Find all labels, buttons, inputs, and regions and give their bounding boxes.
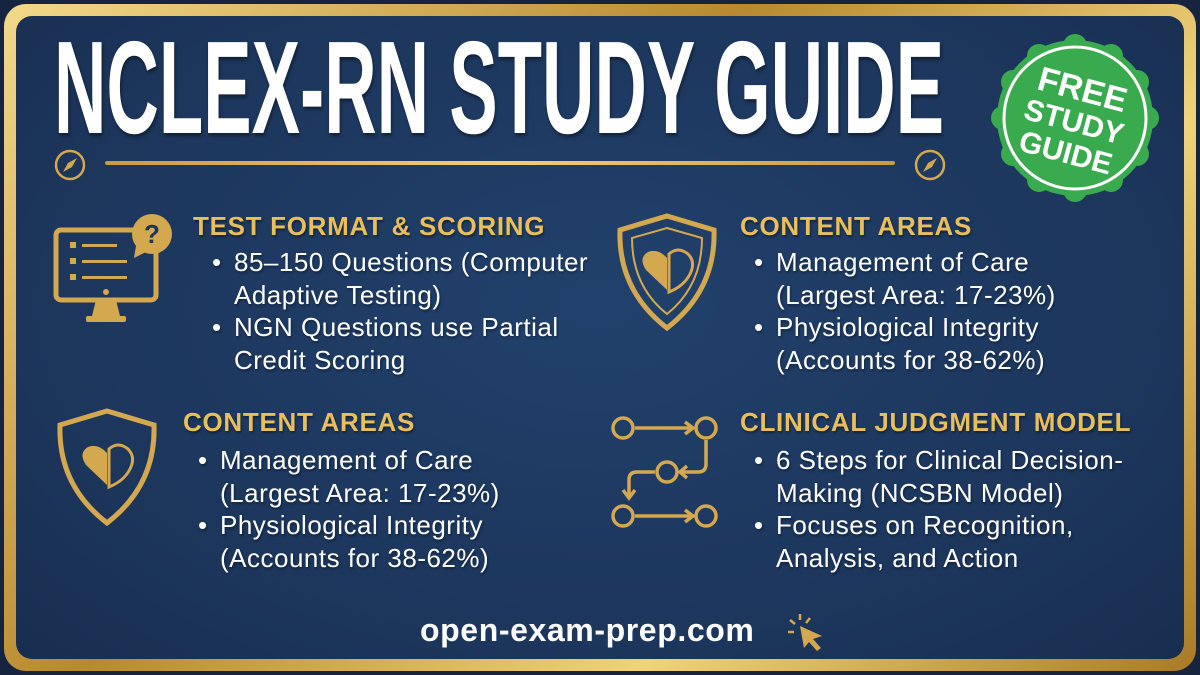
bullets: content areas left: Physiological Integrity [220, 510, 483, 540]
title: NCLEX-RN STUDY GUIDE [54, 14, 944, 161]
icon: shield right [617, 213, 717, 331]
bullets: clinical judgment: Making (NCSBN Model) [776, 478, 1063, 508]
bullets: clinical judgment: Analysis, and Action [776, 542, 1019, 572]
icon: shield left [57, 408, 157, 526]
bullets: content areas left: (Accounts for 38-62%) [220, 542, 489, 572]
bullets: test format: Adaptive Testing) [234, 280, 441, 310]
bullets: test format: NGN Questions use Partial [234, 312, 559, 342]
bullets: test format: 85–150 Questions (Computer [234, 247, 588, 277]
bullets: test format [213, 247, 588, 377]
bullets: content areas left: (Largest Area: 17-23%) [220, 478, 500, 508]
bullets: content areas right: Management of Care [776, 247, 1029, 277]
bullets: clinical judgment: 6 Steps for Clinical Decision- [776, 445, 1123, 475]
bullets: content areas right: (Accounts for 38-62%) [776, 344, 1045, 374]
icon: flow diagram [611, 416, 718, 528]
badge: free study guide: GUIDE [1015, 125, 1116, 181]
icon: monitor with question: ? [144, 219, 160, 249]
bullets: content areas right: (Largest Area: 17-23%) [776, 280, 1056, 310]
bullets: content areas right: Physiological Integrity [776, 312, 1039, 342]
footer url: open-exam-prep.com [420, 612, 754, 648]
heading: test format: TEST FORMAT & SCORING [193, 211, 545, 241]
bullets: content areas left [199, 445, 500, 575]
heading: content areas right: CONTENT AREAS [740, 211, 972, 241]
bullets: content areas right [755, 247, 1056, 377]
heading: content areas left: CONTENT AREAS [183, 407, 415, 437]
icon: cursor click [788, 614, 822, 651]
badge: free study guide: STUDY [1020, 93, 1127, 151]
bullets: test format: Credit Scoring [234, 344, 406, 374]
heading: clinical judgment: CLINICAL JUDGMENT MODEL [740, 407, 1131, 437]
badge: free study guide: FREE [1034, 60, 1131, 120]
bullets: clinical judgment [755, 445, 1123, 575]
bullets: content areas left: Management of Care [220, 445, 473, 475]
icon: monitor with question [54, 214, 172, 322]
badge: free study guide [991, 34, 1159, 202]
icon: compass left [54, 150, 86, 180]
bullets: clinical judgment: Focuses on Recognition, [776, 510, 1074, 540]
icon: compass right [914, 150, 946, 180]
